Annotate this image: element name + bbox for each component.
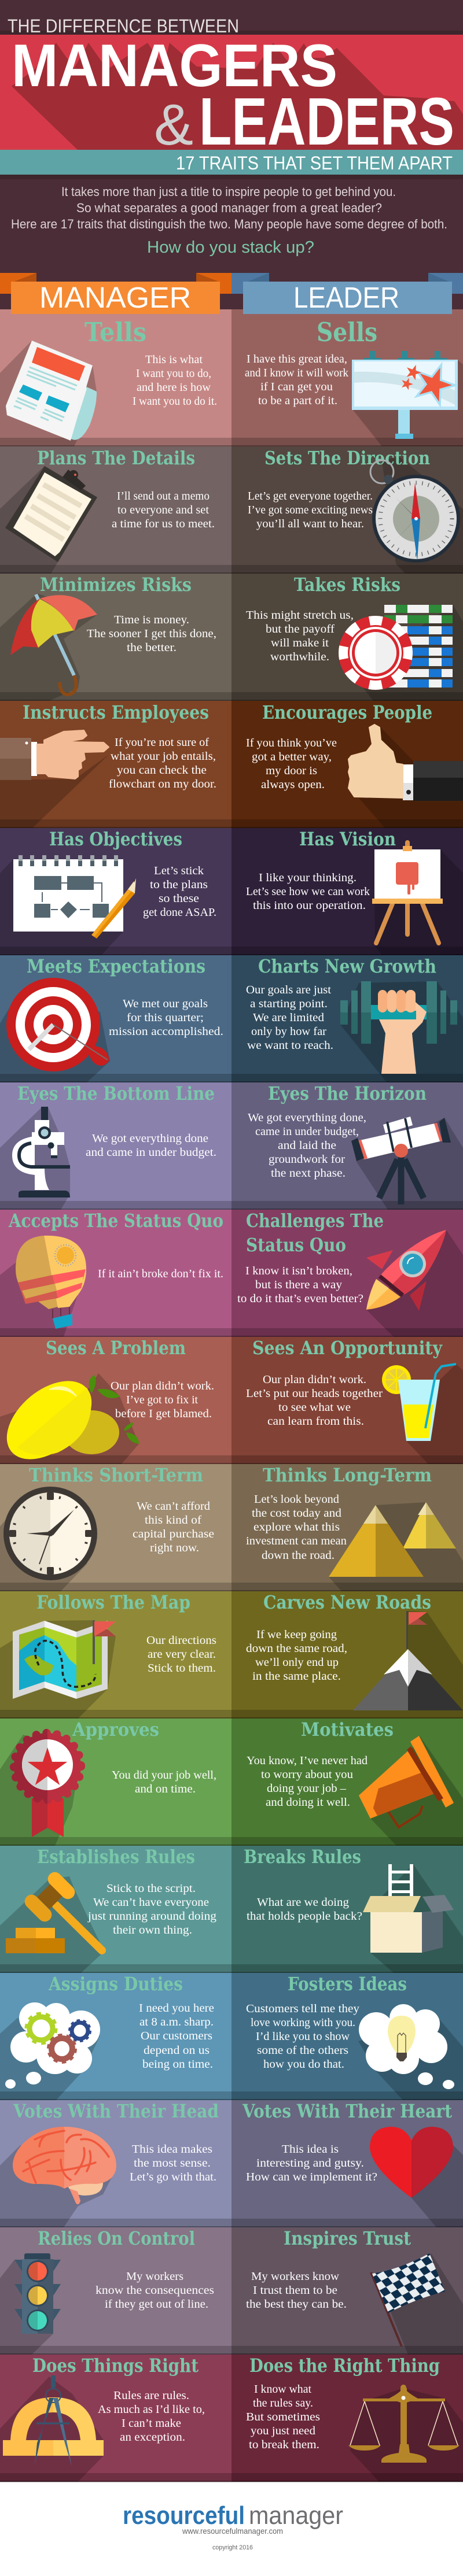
heading: Relies On Control — [38, 2227, 195, 2249]
quote — [111, 1380, 214, 1420]
panel: motivates — [232, 1718, 463, 1846]
quote: Time is money. — [114, 613, 189, 626]
icon: hot air balloon — [16, 1236, 86, 1329]
quote: at 8 a.m. sharp. — [139, 2016, 214, 2028]
quote: you just need — [251, 2425, 315, 2437]
quote: This idea is — [282, 2143, 339, 2156]
quote: Our goals are just — [246, 984, 331, 996]
quote: doing your job – — [267, 1782, 347, 1795]
quote: but is there a way — [255, 1278, 343, 1291]
quote: If we keep going — [256, 1628, 337, 1641]
quote: Let’s get everyone together. — [248, 490, 373, 502]
icon: heart — [370, 2127, 453, 2198]
quote: in the same place. — [252, 1670, 341, 1683]
quote: The sooner I get this done, — [87, 627, 216, 640]
quote: down the same road, — [246, 1642, 347, 1655]
panel: breaks rules — [232, 1846, 463, 1973]
quote: you’ll all want to hear. — [256, 518, 364, 530]
quote: some of the others — [257, 2044, 348, 2057]
heading: Follows The Map — [36, 1591, 190, 1613]
quote: this into our operation. — [253, 899, 366, 912]
icon: checkered flag — [371, 2253, 445, 2346]
quote — [146, 1634, 216, 1675]
heading: Fosters Ideas — [288, 1973, 407, 1995]
panel: sets the direction — [232, 446, 463, 574]
icon: rosette badge — [14, 1733, 81, 1837]
quote: my door is — [266, 764, 317, 777]
quote: Let’s stick — [154, 864, 204, 877]
quote: can learn from this. — [267, 1415, 364, 1428]
quote: I’ll send out a memo — [117, 490, 210, 502]
quote — [133, 1500, 214, 1554]
icon: clipboard — [5, 466, 97, 562]
quote: How can we implement it? — [246, 2171, 377, 2183]
quote: will make it — [271, 637, 329, 649]
quote — [246, 1493, 347, 1562]
quote — [246, 1628, 347, 1683]
quote: if they get out of line. — [105, 2298, 208, 2311]
heading: Sets The Direction — [264, 447, 430, 469]
heading: tells: Tells — [84, 317, 146, 348]
icon: thought cloud with gears — [5, 2002, 100, 2089]
icon: clock — [3, 1487, 97, 1580]
heading: Eyes The Horizon — [268, 1082, 427, 1104]
quote: This idea makes — [132, 2143, 212, 2156]
panel: carves new roads — [232, 1591, 463, 1718]
heading — [246, 1210, 384, 1256]
intro text — [11, 184, 447, 231]
quote: if I can get you — [260, 380, 333, 393]
quote: only by how far — [251, 1025, 326, 1038]
quote — [130, 2143, 216, 2183]
quote: I trust them to be — [253, 2284, 337, 2297]
heading: Takes Risks — [294, 574, 400, 596]
heading: Breaks Rules — [244, 1846, 361, 1868]
heading: Status Quo — [246, 1234, 346, 1256]
panel: follows the map — [0, 1591, 232, 1718]
header — [0, 16, 463, 179]
intro text: So what separates a good manager from a great leader? — [76, 201, 382, 215]
quote: If you think you’ve — [246, 737, 337, 749]
quote: Customers tell me they — [246, 2002, 360, 2015]
quote: to see what we — [278, 1401, 351, 1414]
icon: pointing hand — [0, 730, 109, 780]
panel: instructs employees — [0, 701, 232, 828]
icon: brain — [13, 2127, 116, 2204]
quote: to break them. — [249, 2438, 319, 2451]
panel: relies on control — [0, 2227, 232, 2355]
icon: easel — [372, 840, 443, 943]
quote: I know it isn’t broken, — [245, 1265, 352, 1277]
quote — [246, 984, 333, 1052]
quote — [248, 490, 373, 530]
icon: rocket — [366, 1230, 446, 1311]
quote: down the road. — [262, 1549, 335, 1562]
logo: resourceful — [123, 2501, 245, 2530]
heading: Carves New Roads — [263, 1591, 431, 1613]
icon: scales — [348, 2385, 460, 2463]
copyright: copyright 2016 — [212, 2544, 253, 2551]
website: www.resourcefulmanager.com — [182, 2526, 283, 2536]
quote: an exception. — [120, 2431, 185, 2444]
quote: love working with you. — [251, 2016, 355, 2029]
icon: billboard — [352, 351, 463, 439]
quote — [112, 490, 215, 530]
quote: that holds people back? — [247, 1910, 362, 1923]
quote: the best they can be. — [246, 2298, 347, 2311]
title: ampersand: & — [154, 93, 193, 157]
panel: thinks long-term — [232, 1464, 463, 1591]
heading: Inspires Trust — [284, 2227, 411, 2249]
quote: and laid the — [278, 1139, 336, 1152]
quote: My workers — [126, 2270, 183, 2283]
ribbon: leader — [232, 273, 463, 314]
quote: this kind of — [145, 1514, 201, 1527]
panel: tells — [0, 309, 232, 446]
quote — [143, 864, 216, 919]
quote — [86, 1132, 216, 1159]
heading: Plans The Details — [37, 447, 195, 469]
heading: Encourages People — [262, 701, 432, 723]
quote: Our customers — [141, 2030, 212, 2042]
heading: sells: Sells — [317, 317, 377, 348]
heading: Establishes Rules — [37, 1846, 195, 1868]
quote: groundwork for — [269, 1153, 345, 1166]
quote — [112, 1769, 216, 1795]
quote: and came in under budget. — [86, 1146, 216, 1159]
quote: explore what this — [253, 1521, 340, 1533]
panel: plans the details — [0, 446, 232, 574]
icon: umbrella — [10, 594, 97, 694]
quote: worthwhile. — [270, 651, 329, 663]
quote — [247, 1896, 362, 1923]
quote: the most sense. — [134, 2157, 211, 2170]
quote: so these — [159, 892, 199, 905]
heading: Challenges The — [246, 1210, 384, 1232]
icon: poker chips — [339, 605, 453, 690]
icon: dumbbell fist — [340, 981, 457, 1074]
quote: We can’t afford — [137, 1500, 210, 1513]
quote: mission accomplished. — [109, 1025, 223, 1038]
quote: for this quarter; — [127, 1011, 204, 1024]
icon: lemonade — [382, 1364, 456, 1441]
panel: votes with their heart — [232, 2100, 463, 2227]
quote: we want to reach. — [247, 1039, 333, 1052]
quote: know the consequences — [95, 2284, 214, 2297]
quote: their own thing. — [113, 1924, 192, 1936]
icon: map — [13, 1620, 116, 1699]
quote — [246, 2383, 320, 2451]
heading: Accepts The Status Quo — [8, 1210, 223, 1232]
panel: does the right thing — [232, 2355, 463, 2482]
icon: megaphone — [359, 1736, 454, 1827]
quote — [247, 1754, 368, 1809]
quote: to worry about you — [261, 1768, 353, 1781]
quote: I know what — [254, 2383, 311, 2396]
quote — [139, 2002, 214, 2071]
icon: protractor and compass — [3, 2375, 104, 2466]
panel: does things right — [0, 2355, 232, 2482]
quote: I want you to do it. — [133, 395, 217, 408]
quote: we’ll only end up — [255, 1656, 339, 1669]
quote: Let’s look beyond — [254, 1493, 339, 1506]
heading: Sees A Problem — [46, 1337, 186, 1359]
quote: I’ve got to fix it — [126, 1394, 198, 1406]
quote: Let’s go with that. — [130, 2171, 216, 2183]
quote: came in under budget, — [255, 1125, 359, 1138]
quote: Let’s put our heads together — [246, 1387, 383, 1400]
icon: flowchart notepad — [13, 855, 136, 938]
quote: and on time. — [135, 1783, 196, 1795]
quote: This is what — [145, 353, 203, 366]
quote — [109, 997, 223, 1038]
quote: and I know it will work — [245, 367, 349, 379]
icon: thumbs up — [348, 725, 463, 801]
heading: Thinks Short-Term — [29, 1464, 203, 1486]
panel: encourages people — [232, 701, 463, 828]
quote — [133, 353, 217, 408]
quote: Let’s see how we can work — [246, 885, 370, 898]
quote: If you’re not sure of — [115, 736, 209, 749]
ribbon: leader: LEADER — [293, 281, 399, 314]
title band — [0, 35, 463, 150]
quote: But sometimes — [246, 2411, 320, 2423]
quote: Our directions — [146, 1634, 216, 1647]
quote — [246, 2270, 347, 2311]
panel: challenges the status quo — [232, 1210, 463, 1337]
icon: lemons — [0, 1366, 139, 1474]
panel: charts new growth — [232, 955, 463, 1082]
panel: inspires trust — [232, 2227, 463, 2355]
quote: I’ve got some exciting news — [248, 504, 373, 516]
quote — [87, 613, 216, 654]
panel: approves — [0, 1718, 232, 1846]
quote — [98, 2389, 205, 2444]
quote: What are we doing — [257, 1896, 349, 1909]
heading: Eyes The Bottom Line — [17, 1082, 215, 1104]
panel: meets expectations — [0, 955, 232, 1082]
panel: votes with their head — [0, 2100, 232, 2227]
heading: Votes With Their Head — [13, 2100, 219, 2122]
quote: and here is how — [137, 381, 211, 394]
quote: right now. — [150, 1542, 199, 1554]
quote: You did your job well, — [112, 1769, 216, 1782]
quote: I have this great idea, — [247, 353, 347, 365]
icon: microscope — [12, 1107, 70, 1198]
quote: capital purchase — [133, 1528, 214, 1540]
quote: the cost today and — [252, 1507, 341, 1520]
icon: gavel — [6, 1869, 102, 1953]
quote: I like your thinking. — [259, 871, 357, 884]
title: managers: MANAGERS — [12, 32, 337, 99]
quote: I want you to do, — [136, 367, 211, 380]
quote: being on time. — [142, 2058, 213, 2071]
heading: Does Things Right — [32, 2355, 199, 2377]
quote: This might stretch us, — [246, 609, 354, 622]
quote: always open. — [261, 778, 325, 791]
panel: fosters ideas — [232, 1973, 463, 2100]
panel: establishes rules — [0, 1846, 232, 1973]
icon: compass — [370, 460, 460, 563]
panel: has vision — [232, 828, 463, 955]
heading: Meets Expectations — [27, 955, 205, 977]
quote: a starting point. — [250, 997, 328, 1010]
heading: Motivates — [301, 1718, 394, 1740]
ribbon: manager: MANAGER — [39, 281, 191, 314]
panel: assigns duties — [0, 1973, 232, 2100]
panel: minimizes risks — [0, 574, 232, 701]
icon: mountain with flag — [353, 1611, 463, 1710]
quote: before I get blamed. — [115, 1407, 212, 1420]
quote: flowchart on my door. — [109, 778, 216, 790]
quote: the next phase. — [271, 1167, 346, 1180]
quote: I’d like you to show — [256, 2030, 350, 2043]
quote: to be a part of it. — [258, 394, 337, 407]
panel: takes risks — [232, 574, 463, 701]
quote: Stick to them. — [148, 1662, 216, 1675]
quote: depend on us — [144, 2044, 210, 2057]
subtitle band — [0, 150, 463, 175]
quote: We are limited — [253, 1011, 324, 1024]
heading: Approves — [72, 1718, 159, 1740]
quote — [246, 609, 354, 663]
panel: has objectives — [0, 828, 232, 955]
footer — [0, 2482, 463, 2576]
quote — [87, 1882, 216, 1936]
quote: You know, I’ve never had — [247, 1754, 368, 1767]
panel: eyes the bottom line — [0, 1082, 232, 1210]
quote: I can’t make — [122, 2417, 181, 2430]
quote — [246, 2002, 360, 2071]
quote: but the payoff — [266, 623, 335, 635]
quote: how you do that. — [263, 2058, 344, 2071]
quote: My workers know — [251, 2270, 339, 2283]
heading: Has Vision — [299, 828, 396, 850]
panel: sees a problem — [0, 1337, 232, 1474]
quote: the better. — [127, 641, 177, 654]
quote: interesting and gutsy. — [256, 2157, 364, 2170]
quote: a time for us to meet. — [112, 518, 215, 530]
quote: you can check the — [117, 764, 207, 777]
logo — [123, 2501, 343, 2530]
icon: traffic light — [14, 2253, 61, 2334]
icon: thought cloud with bulb — [359, 2004, 454, 2089]
icon: box with ladder — [363, 1864, 454, 1953]
quote: If it ain’t broke don’t fix it. — [98, 1267, 223, 1280]
heading: Thinks Long-Term — [263, 1464, 432, 1486]
quote: Rules are rules. — [113, 2389, 189, 2402]
quote — [248, 1111, 366, 1180]
quote: and doing it well. — [266, 1796, 350, 1809]
logo: manager — [249, 2501, 343, 2530]
panel: eyes the horizon — [232, 1082, 463, 1210]
quote: to the plans — [150, 878, 208, 891]
question: How do you stack up? — [147, 238, 314, 257]
intro text: It takes more than just a title to inspire people to get behind you. — [61, 184, 396, 199]
heading: Charts New Growth — [258, 955, 436, 977]
ribbon: manager — [0, 273, 232, 314]
quote: investment can mean — [246, 1535, 347, 1547]
quote — [245, 353, 349, 407]
icon: pyramids — [329, 1502, 456, 1577]
quote: Our plan didn’t work. — [263, 1373, 366, 1386]
quote: I need you here — [139, 2002, 214, 2015]
quote: to everyone and set — [117, 504, 209, 516]
heading: Has Objectives — [49, 828, 182, 850]
heading: Minimizes Risks — [40, 574, 192, 596]
quote: are very clear. — [148, 1648, 216, 1661]
icon: telescope — [351, 1117, 451, 1204]
heading: Assigns Duties — [48, 1973, 183, 1995]
quote: just running around doing — [87, 1910, 216, 1923]
quote: Our plan didn’t work. — [111, 1380, 214, 1392]
subtitle: the difference between: THE DIFFERENCE BETWEEN — [8, 16, 239, 36]
quote: As much as I’d like to, — [98, 2403, 205, 2416]
quote: to do it that’s even better? — [237, 1292, 363, 1305]
panel: sells — [232, 309, 463, 446]
panel: sees an opportunity — [232, 1337, 463, 1464]
quote — [109, 736, 216, 790]
quote: get done ASAP. — [143, 906, 216, 919]
quote: We met our goals — [123, 997, 208, 1010]
heading: Sees An Opportunity — [252, 1337, 443, 1359]
quote: We can’t have everyone — [93, 1896, 209, 1909]
icon: target — [6, 978, 109, 1071]
panel: thinks short-term — [0, 1464, 232, 1591]
icon: newspaper — [6, 341, 97, 441]
quote — [246, 1373, 383, 1428]
quote — [246, 871, 370, 912]
panel: accepts the status quo — [0, 1210, 232, 1337]
quote: what your job entails, — [111, 750, 216, 763]
quote: We got everything done — [92, 1132, 208, 1145]
quote — [95, 2270, 214, 2311]
quote: We got everything done, — [248, 1111, 366, 1124]
quote — [246, 2143, 377, 2183]
heading: Instructs Employees — [23, 701, 209, 723]
quote: the rules say. — [253, 2397, 313, 2409]
quote — [237, 1265, 363, 1305]
quote: got a better way, — [252, 751, 332, 763]
quote: Stick to the script. — [106, 1882, 196, 1895]
quote — [246, 737, 337, 791]
